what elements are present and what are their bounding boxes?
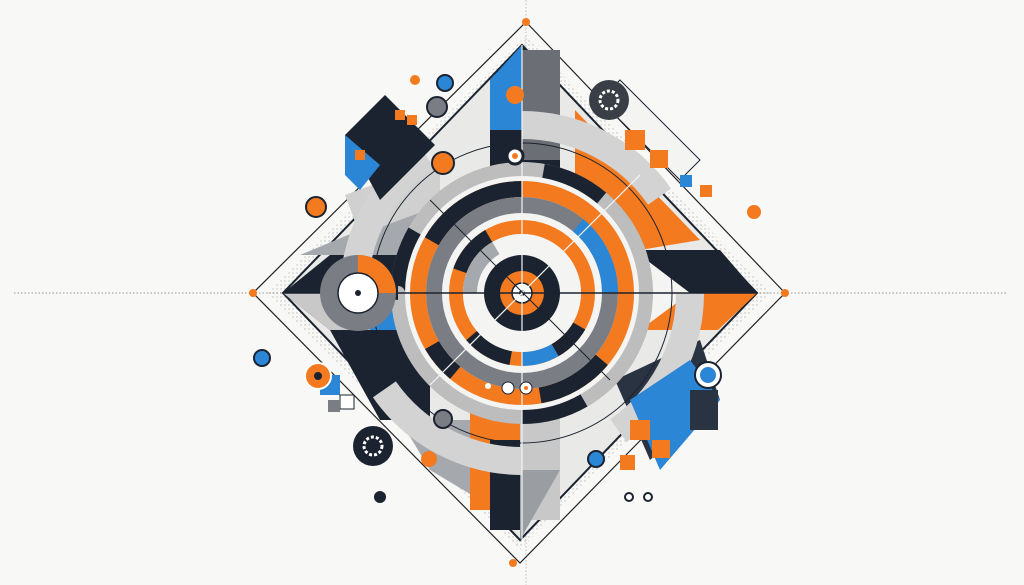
gear icons [589, 80, 629, 120]
bottom-left grid [320, 375, 354, 412]
upper left [300, 205, 420, 255]
upper right orange block [575, 110, 700, 250]
top-left grid panel [345, 95, 435, 200]
bottom-right grid panel [620, 360, 720, 470]
left wedge [283, 255, 420, 330]
concentric target [283, 45, 757, 540]
lower left [330, 330, 430, 420]
bottom column [470, 400, 520, 510]
lower right [615, 340, 720, 460]
top-right grid panel [600, 80, 712, 197]
small dots row bottom [485, 382, 532, 394]
outer diamond outline [253, 22, 785, 563]
decorative node circles [249, 18, 789, 567]
top column [490, 45, 560, 200]
right wedge [630, 250, 757, 293]
main diamond body [283, 45, 757, 540]
left target icon [320, 255, 396, 331]
